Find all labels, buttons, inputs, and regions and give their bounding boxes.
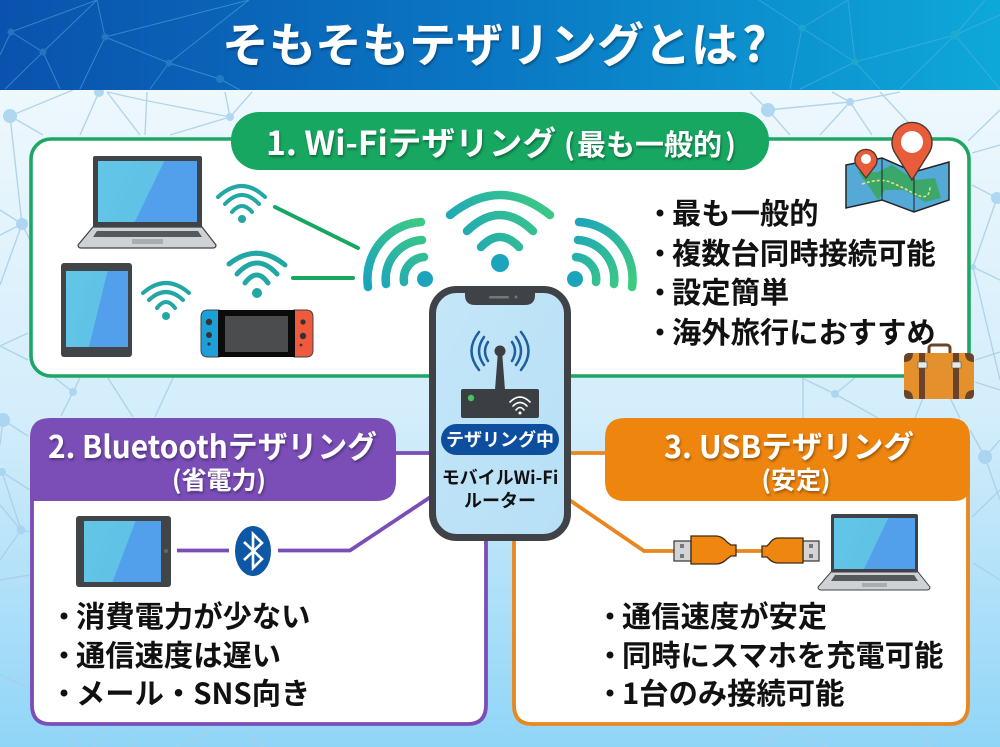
panel: 3 USB tethering <box>514 418 970 724</box>
heading: USB tethering: 3. USBテザリング <box>664 422 914 467</box>
text: Wi-Fi features: 設定簡単 <box>672 270 789 312</box>
title: そもそもテザリングとは <box>222 7 738 76</box>
heading: Bluetooth tethering: 2. Bluetoothテザリング <box>48 422 377 467</box>
text: Bluetooth features: 通信速度は遅い <box>76 633 281 675</box>
icon: small wifi laptop <box>218 186 265 223</box>
label: mobile Wi-Fi router: ルーター <box>464 487 536 513</box>
heading: USB tethering: (安定) <box>762 461 830 497</box>
panel: 2 Bluetooth tethering <box>30 418 486 724</box>
icon: landscape tablet <box>76 516 171 587</box>
panel: 1 Wi-Fi tethering <box>31 112 974 399</box>
title: ? <box>742 6 767 76</box>
heading: USB tethering <box>605 418 970 501</box>
label: mobile Wi-Fi router <box>442 464 558 513</box>
text: Bluetooth features: メール・SNS向き <box>76 671 310 713</box>
icon: game console <box>201 310 313 357</box>
icon: suitcase <box>904 345 974 399</box>
header banner <box>0 0 1000 90</box>
icon: map with pins <box>846 122 949 212</box>
heading: Wi-Fi tethering: ) <box>725 122 736 164</box>
heading: Wi-Fi tethering: 最も一般的 <box>577 122 722 164</box>
heading: Wi-Fi tethering: ( <box>564 122 575 164</box>
icon: Bluetooth <box>235 526 271 576</box>
text: USB features: 1台のみ接続可能 <box>622 671 844 713</box>
heading: Bluetooth tethering: (省電力) <box>172 461 266 497</box>
icon: laptop <box>818 514 930 590</box>
icon: large wifi right <box>567 222 633 287</box>
icon: small wifi tablet <box>143 283 189 320</box>
connector line <box>177 496 432 550</box>
text: Wi-Fi features <box>656 191 936 352</box>
phone notch <box>465 290 535 305</box>
icon: router with antenna <box>461 332 539 418</box>
text: Wi-Fi features: 海外旅行におすすめ <box>672 310 936 352</box>
label: mobile Wi-Fi router: モバイルWi-Fi <box>442 464 558 490</box>
text: USB features <box>606 594 943 713</box>
icon: large wifi left <box>367 222 433 287</box>
phone <box>432 290 568 538</box>
icon: laptop <box>78 156 216 248</box>
icon: tablet <box>61 263 132 357</box>
text: Bluetooth features: 消費電力が少ない <box>76 594 310 636</box>
text: USB features: 同時にスマホを充電可能 <box>622 633 943 675</box>
text: Wi-Fi features: 最も一般的 <box>672 191 818 233</box>
heading: Wi-Fi tethering <box>231 112 769 170</box>
icon: large wifi top <box>450 195 550 272</box>
text: Wi-Fi features: 複数台同時接続可能 <box>672 231 936 273</box>
connector lines <box>275 207 358 278</box>
icon: USB cable <box>568 499 819 564</box>
badge: tethering active: テザリング中 <box>446 426 554 452</box>
text: USB features: 通信速度が安定 <box>622 594 827 636</box>
heading: Wi-Fi tethering: 1. Wi-Fiテザリング <box>266 117 556 165</box>
heading: Bluetooth tethering <box>30 418 396 501</box>
text: Bluetooth features <box>60 594 310 713</box>
icon: small wifi console <box>229 253 285 298</box>
